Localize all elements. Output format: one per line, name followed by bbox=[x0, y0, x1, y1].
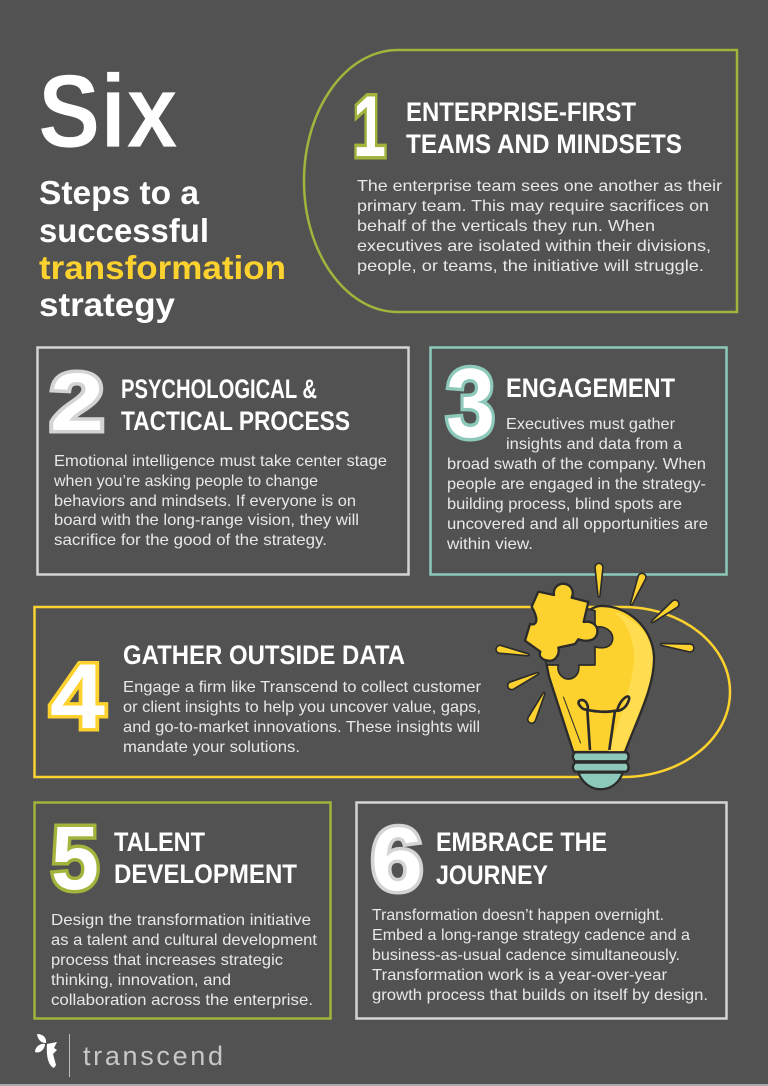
body 3: within view. bbox=[446, 536, 533, 553]
body 3: broad swath of the company. When bbox=[447, 456, 706, 473]
body 3: building process, blind spots are bbox=[447, 496, 682, 513]
number 2: 2 bbox=[50, 357, 104, 448]
panel 6: embrace the journey bbox=[356, 802, 726, 1018]
heading 5: DEVELOPMENT bbox=[114, 859, 297, 889]
heading 6: EMBRACE THE bbox=[436, 827, 607, 857]
heading 2 bbox=[121, 374, 350, 436]
heading 3: ENGAGEMENT bbox=[506, 373, 675, 403]
number 1: 1 bbox=[353, 79, 386, 175]
body 4 bbox=[123, 679, 482, 756]
body 2: board with the long-range vision, they will bbox=[54, 512, 359, 529]
heading 5 bbox=[114, 827, 297, 889]
body 2: behaviors and mindsets. If everyone is on bbox=[54, 493, 356, 510]
title block: successful bbox=[39, 212, 209, 249]
heading 1 bbox=[406, 97, 682, 159]
body 1: behalf of the verticals they run. When bbox=[357, 218, 655, 235]
heading 2: TACTICAL PROCESS bbox=[121, 406, 350, 436]
body 4: mandate your solutions. bbox=[123, 739, 300, 756]
body 5: thinking, innovation, and bbox=[51, 972, 231, 989]
number 4: 4 bbox=[50, 646, 105, 748]
body 1: people, or teams, the initiative will struggle. bbox=[357, 258, 704, 275]
title block: transformation bbox=[39, 249, 286, 286]
heading 1: ENTERPRISE-FIRST bbox=[406, 97, 636, 127]
body 1: executives are isolated within their divisions, bbox=[357, 238, 711, 255]
body 5: Design the transformation initiative bbox=[51, 912, 311, 929]
body 6 bbox=[372, 907, 708, 1004]
heading 4: GATHER OUTSIDE DATA bbox=[123, 640, 405, 670]
body 5 bbox=[51, 912, 318, 1009]
icon: light bulb with puzzle piece bbox=[495, 563, 694, 789]
body 1: primary team. This may require sacrifices on bbox=[357, 198, 709, 215]
body 3: uncovered and all opportunities are bbox=[447, 516, 708, 533]
body 2: when you’re asking people to change bbox=[53, 473, 318, 490]
panel 2: psychological and tactical process bbox=[38, 348, 408, 574]
body 5: collaboration across the enterprise. bbox=[51, 992, 313, 1009]
title block: strategy bbox=[39, 286, 176, 323]
body 6: Transformation work is a year-over-year bbox=[372, 967, 668, 984]
body 3 bbox=[446, 416, 708, 553]
body 1: The enterprise team sees one another as their bbox=[357, 178, 723, 195]
title block bbox=[38, 54, 286, 323]
heading 1: TEAMS AND MINDSETS bbox=[406, 129, 682, 159]
number 3: 3 bbox=[446, 348, 495, 458]
number 6: 6 bbox=[371, 810, 423, 910]
logo: transcend: transcend bbox=[83, 1041, 223, 1071]
body 3: Executives must gather bbox=[506, 416, 676, 433]
body 3: insights and data from a bbox=[506, 436, 682, 453]
panel 1: enterprise-first teams bbox=[304, 50, 737, 312]
body 4: Engage a firm like Transcend to collect customer bbox=[123, 679, 482, 696]
body 2 bbox=[53, 453, 387, 549]
heading 5: TALENT bbox=[114, 827, 205, 857]
panel 3: engagement bbox=[430, 348, 726, 574]
title block: Steps to a bbox=[39, 174, 200, 211]
logo mark bbox=[35, 1034, 57, 1068]
title block: Six bbox=[38, 54, 178, 170]
body 6: Transformation doesn’t happen overnight. bbox=[372, 907, 664, 924]
logo: transcend bbox=[35, 1034, 223, 1077]
body 3: people are engaged in the strategy- bbox=[447, 476, 706, 493]
body 2: Emotional intelligence must take center stage bbox=[54, 453, 387, 470]
heading 2: PSYCHOLOGICAL & bbox=[121, 374, 317, 404]
panel 4: gather outside data bbox=[34, 607, 730, 777]
body 5: as a talent and cultural development bbox=[51, 932, 318, 949]
panel 5: talent development bbox=[34, 802, 330, 1018]
body 6: growth process that builds on itself by design. bbox=[372, 987, 708, 1004]
body 4: or client insights to help you uncover value, gaps, bbox=[123, 699, 481, 716]
body 6: business-as-usual cadence simultaneously. bbox=[372, 947, 680, 964]
body 6: Embed a long-range strategy cadence and a bbox=[372, 927, 690, 944]
body 5: process that increases strategic bbox=[51, 952, 283, 969]
heading 6: JOURNEY bbox=[436, 860, 548, 890]
body 2: sacrifice for the good of the strategy. bbox=[54, 532, 327, 549]
number 5: 5 bbox=[51, 809, 99, 909]
body 4: and go-to-market innovations. These insights will bbox=[123, 719, 480, 736]
body 1 bbox=[357, 178, 723, 275]
heading 6 bbox=[436, 827, 607, 890]
